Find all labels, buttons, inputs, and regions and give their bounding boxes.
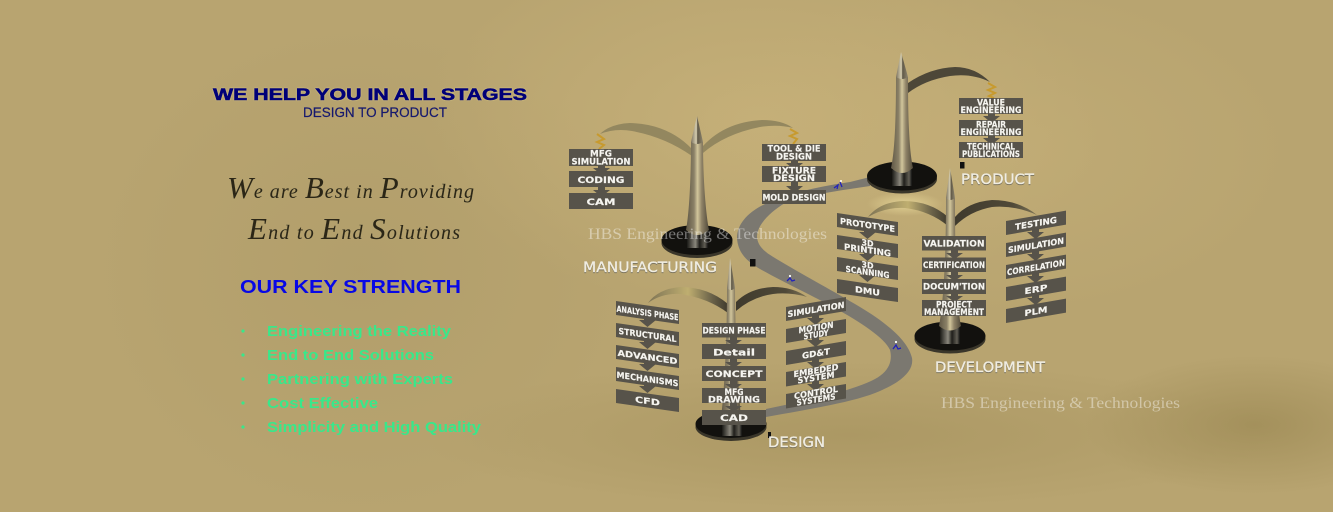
box: motion study [786, 319, 846, 345]
strengths list [241, 323, 482, 436]
spire [686, 116, 709, 248]
strengths list: End to End Solutions [267, 347, 434, 364]
box: project management: MANAGEMENT [924, 308, 984, 318]
box: 3d printing: PRINTING [844, 243, 891, 259]
box: fixture design: DESIGN [773, 174, 815, 184]
box: concept: CONCEPT [706, 370, 763, 380]
box: plm: PLM [1024, 305, 1047, 319]
flow: manufacturing steps [569, 149, 633, 209]
box: repair engineering [959, 120, 1023, 138]
box: 3d scanning [837, 257, 898, 283]
box: motion study: MOTION [798, 321, 833, 336]
label: development: DEVELOPMENT [935, 360, 1045, 376]
icon: gold connectors [597, 129, 797, 149]
label: product: PRODUCT [961, 172, 1034, 188]
box: 3d scanning: 3D [862, 260, 874, 272]
box: 3d printing [837, 235, 898, 261]
box: design phase: DESIGN PHASE [702, 326, 766, 336]
box: mfg simulation: MFG [590, 150, 612, 160]
strengths list: Simplicity and High Quality [267, 419, 482, 436]
strengths list: Partnering with Experts [267, 371, 453, 388]
box: advanced: ADVANCED [617, 349, 677, 367]
marker on road [750, 259, 756, 266]
box: simulation: SIMULATION [1008, 237, 1064, 256]
box: cad: CAD [720, 414, 748, 424]
stage: design [616, 258, 846, 451]
label: manufacturing: MANUFACTURING [583, 260, 717, 276]
box: motion study: STUDY [803, 328, 829, 343]
box: project management: PROJECT [936, 300, 972, 310]
marker [768, 432, 771, 438]
spire [721, 258, 742, 436]
box: correlation: CORRELATION [1007, 258, 1065, 278]
box: technical publications [959, 142, 1023, 160]
box: mfg simulation [569, 149, 633, 168]
box: tool and die design [762, 144, 826, 162]
script tagline: End to End Solutions [247, 211, 460, 246]
box: cfd: CFD [635, 395, 660, 409]
box: mfg drawing [702, 388, 766, 406]
box: mfg simulation: SIMULATION [572, 158, 630, 168]
icon: walking figure 2 [787, 275, 795, 281]
box: fixture design [762, 166, 826, 184]
box: embedded system [786, 362, 846, 388]
script tagline [227, 170, 474, 246]
box: fixture design: FIXTURE [772, 166, 816, 176]
box: certification: CERTIFICATION [923, 261, 985, 271]
box: simulation: SIMULATION [787, 301, 844, 320]
box: structural: STRUCTURAL [618, 327, 677, 345]
box: repair engineering: REPAIR [976, 120, 1006, 130]
watermark 1: HBS Engineering & Technologies [588, 226, 827, 243]
heading: we help you: WE HELP YOU IN ALL STAGES [213, 86, 527, 104]
box: control systems: SYSTEMS [797, 392, 836, 409]
box: validation: VALIDATION [924, 240, 985, 250]
box: coding: CODING [578, 176, 625, 186]
label: design: DESIGN [768, 435, 825, 451]
box: project management [922, 300, 986, 318]
arc: product [908, 67, 990, 93]
spire [939, 168, 961, 344]
strengths list: Engineering the Reality [267, 323, 452, 340]
road connecting stages [737, 177, 912, 417]
flow: validation steps [922, 236, 986, 318]
box: value engineering [959, 98, 1023, 116]
icon: walking figure 3 [893, 341, 901, 349]
box: mold design: MOLD DESIGN [762, 194, 826, 204]
strengths list: Cost Effective [267, 395, 378, 412]
box: gd&t: GD&T [802, 347, 830, 362]
box: value engineering: VALUE [977, 98, 1005, 108]
floor glow [867, 192, 943, 216]
marker [960, 162, 964, 168]
box: mfg drawing: MFG [724, 388, 744, 398]
box: detail: Detail [713, 348, 755, 358]
icon: walking figure 1 [834, 180, 842, 189]
stage: manufacturing [569, 116, 826, 276]
flow: product steps [959, 98, 1023, 160]
stage: product [867, 52, 1034, 194]
box: mfg drawing: DRAWING [708, 396, 760, 406]
arc: design right [736, 287, 807, 311]
box: 3d printing: 3D [862, 238, 874, 250]
flow: prototype steps [837, 213, 898, 302]
disk base [867, 162, 937, 194]
disk base [914, 322, 986, 354]
flow: simulation steps [786, 297, 846, 410]
box: control systems: CONTROL [794, 385, 839, 402]
flow: design phase steps [702, 323, 766, 425]
subheading: design to product: DESIGN TO PRODUCT [303, 105, 447, 120]
flow: analysis steps [616, 301, 679, 412]
box: embedded system: SYSTEM [797, 370, 834, 387]
arc: development left [868, 201, 948, 226]
box: mechanisms: MECHANISMS [616, 371, 678, 389]
box: technical publications: TECHINICAL [967, 142, 1015, 152]
arc: manufacturing right [703, 120, 793, 153]
flow: tooling steps [762, 144, 826, 204]
box: analysis phase: ANALYSIS PHASE [616, 305, 679, 323]
spire [891, 52, 913, 186]
box: value engineering: ENGINEERING [960, 106, 1022, 116]
stage: development [837, 168, 1066, 376]
box: documentation: DOCUM'TION [923, 282, 985, 292]
watermark 2: HBS Engineering & Technologies [941, 395, 1180, 412]
box: tool and die design: DESIGN [776, 152, 812, 162]
box: embedded system: EMBEDED [794, 363, 838, 380]
disk base [662, 225, 732, 258]
icon: gold connector [988, 83, 995, 98]
box: repair engineering: ENGINEERING [960, 128, 1022, 138]
heading: our key strength: OUR KEY STRENGTH [240, 277, 461, 297]
box: control systems [786, 384, 846, 410]
box: technical publications: PUBLICATIONS [962, 150, 1020, 160]
flow: testing steps [1006, 211, 1066, 323]
box: tool and die design: TOOL & DIE [768, 144, 821, 154]
box: dmu: DMU [855, 285, 880, 299]
script tagline: We are Best in Providing [227, 170, 474, 205]
arc: development right [955, 200, 1037, 226]
box: prototype: PROTOTYPE [840, 217, 895, 235]
box: erp: ERP [1024, 283, 1047, 297]
box: testing: TESTING [1015, 216, 1057, 233]
box: cam: CAM [586, 198, 616, 208]
box: 3d scanning: SCANNING [845, 265, 889, 281]
arc: design left [648, 287, 728, 313]
arc: manufacturing left [600, 123, 692, 156]
disk base [696, 410, 766, 441]
